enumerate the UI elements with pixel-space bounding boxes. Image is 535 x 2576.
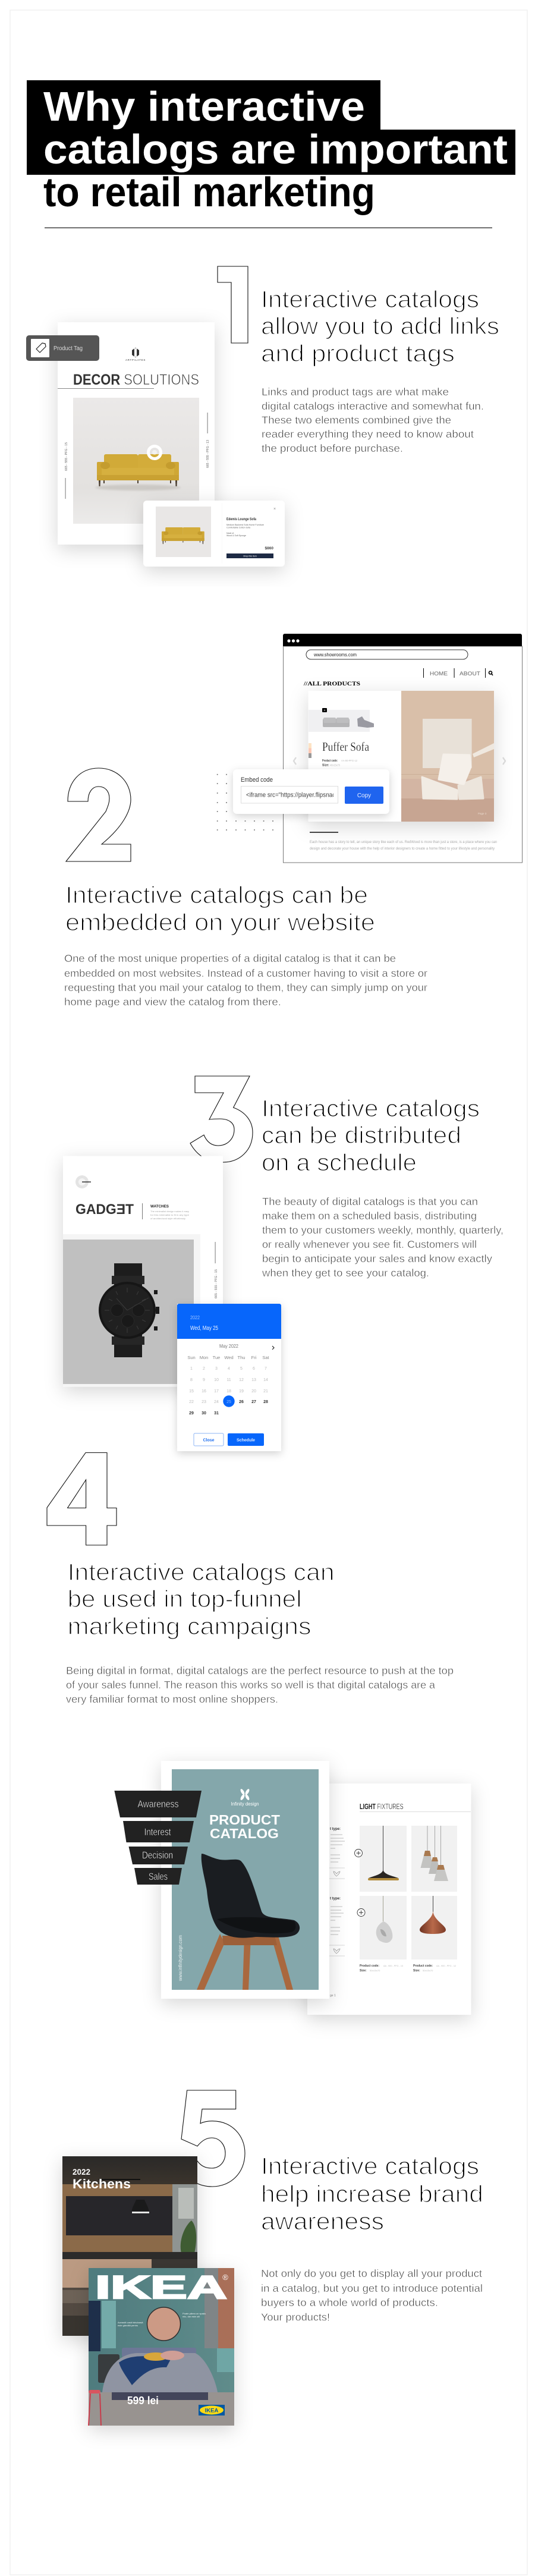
- heading 1: and product tags: [261, 341, 455, 367]
- date grid: 16: [202, 1389, 206, 1394]
- ikea wordmark: IKEA: [95, 2269, 227, 2305]
- heading 3: can be distributed: [262, 1122, 461, 1149]
- heading 5: help increase brand: [261, 2181, 483, 2207]
- embed code card: Copy: [357, 792, 371, 799]
- heading 2: Interactive catalogs can be: [65, 882, 368, 908]
- date grid: 25: [226, 1400, 231, 1404]
- heading 4: be used in top-funnel: [68, 1586, 302, 1612]
- infinity design logo: [231, 1788, 259, 1807]
- title: catalogs are important: [43, 126, 508, 172]
- title: [27, 80, 515, 215]
- site nav: HOME: [430, 671, 448, 677]
- product panel: AA-90-PFG-12: [341, 759, 357, 762]
- product popup: Wood & Soft Sponge: [226, 534, 246, 537]
- body text 3: or really whenever you see fit. Customers will: [262, 1238, 477, 1250]
- product popup: Made of:: [226, 532, 234, 534]
- catalog cover: ikea: ®: [222, 2273, 228, 2282]
- body text 4: Being digital in format, digital catalogs are the perfect resource to push at the top: [66, 1665, 454, 1677]
- body text 2: requesting that you mail your catalog to them, they can simply jump on your: [64, 982, 427, 993]
- heading 1: allow you to add links: [261, 313, 499, 339]
- catalog page: gadget: The minimalist design makes it easy: [150, 1210, 189, 1213]
- embed code card: [233, 769, 389, 814]
- body text 5: buyers to a whole world of products.: [261, 2297, 438, 2308]
- catalog page: gadget: for this minimalist to fit in any type: [150, 1213, 190, 1216]
- heading 4: marketing campaigns: [68, 1613, 311, 1640]
- product codes: 50x15x70: [423, 1969, 433, 1972]
- catalog page: light fixtures: [307, 1784, 471, 2015]
- product name: Puffer Sofa: [322, 740, 370, 754]
- body text 1: digital catalogs interactive and somewhat fun.: [262, 400, 484, 412]
- pendant lamp tile 3: [360, 1896, 407, 1959]
- catalog cover: product catalog: [161, 1761, 329, 1999]
- body text 5: Your products!: [261, 2311, 330, 2323]
- icon: search: [489, 671, 493, 675]
- site nav: [423, 668, 493, 678]
- clipped product column: t type:: [330, 1897, 341, 1901]
- body text 2: embedded on most websites. Instead of a customer having to visit a store or: [64, 967, 427, 979]
- funnel: sales: Sales: [149, 1871, 168, 1882]
- product codes: Size:: [360, 1969, 367, 1973]
- clipped product column: [329, 1828, 345, 1998]
- calendar header: [177, 1304, 281, 1339]
- body text 2: One of the most unique properties of a digital catalog is that it can be: [64, 952, 396, 964]
- catalog title: DECOR SOLUTIONS: [73, 372, 199, 388]
- colour swatches: [309, 743, 311, 758]
- heading 1: Interactive catalogs: [261, 287, 479, 313]
- browser mockup: design and decorate your house with the help of interior designers to create a home fitted to your lifestyle and personality: [310, 847, 495, 851]
- catalog cover: kitchens: 2022: [73, 2168, 90, 2176]
- heading 5: [261, 2153, 483, 2235]
- section 3: [63, 1076, 503, 1451]
- date grid: 1: [190, 1367, 193, 1371]
- tiny captions: [118, 2312, 206, 2327]
- browser mockup: Each house has a story to tell, an unique story like each of us. RedWood is more than just a store, is a place where you can: [310, 840, 497, 844]
- weekdays: Fri: [251, 1355, 257, 1360]
- catalog cover: kitchens: Kitchens: [73, 2176, 131, 2191]
- pendant lamp tile 1: [360, 1826, 407, 1892]
- body text 5: Not only do you get to display all your product: [261, 2267, 482, 2279]
- date grid: 21: [263, 1389, 268, 1394]
- product popup: Edemis Lounge Sofa: [226, 518, 257, 521]
- infinity design logo: Infinity design: [231, 1801, 259, 1807]
- body text 3: them to your customers weekly, monthly, quarterly,: [262, 1224, 503, 1236]
- date grid: 5: [240, 1367, 243, 1371]
- date grid: 22: [189, 1400, 194, 1404]
- product codes: Product code:: [413, 1964, 433, 1968]
- date grid: 14: [263, 1378, 268, 1382]
- url vertical: www.infinitydesign.com: [178, 1935, 183, 1981]
- product panel: Product code:: [322, 759, 338, 763]
- ikea badge: IKEA: [205, 2408, 218, 2414]
- carousel arrows: [294, 757, 296, 765]
- side text: 665 - 555 - PFG - 13: [206, 440, 210, 468]
- date grid: 12: [239, 1378, 244, 1382]
- weekdays: [187, 1355, 270, 1360]
- number 2: [66, 768, 131, 861]
- date grid: 6: [253, 1367, 255, 1371]
- close button: Close: [203, 1439, 215, 1442]
- date grid: 19: [239, 1389, 244, 1394]
- product tag badge: [26, 335, 99, 361]
- footer rule and text: [310, 832, 338, 833]
- calendar header: Wed, May 25: [190, 1325, 218, 1332]
- weekdays: Wed: [224, 1355, 234, 1360]
- body text 1: the product before purchase.: [262, 442, 403, 454]
- schedule button: Schedule: [237, 1439, 255, 1442]
- tiny captions: este gândită pentru: [118, 2324, 138, 2327]
- weekdays: Tue: [213, 1355, 220, 1360]
- catalog cover: kitchens: [62, 2156, 197, 2336]
- catalog page: gadget: [63, 1156, 223, 1386]
- funnel: awareness: Awareness: [138, 1798, 178, 1810]
- dot grid: [217, 774, 273, 831]
- catalog page: decor solutions: [58, 322, 215, 545]
- funnel: awareness: [114, 1791, 202, 1817]
- cover title: PRODUCT: [209, 1812, 280, 1828]
- product codes: [360, 1964, 457, 1973]
- calendar widget: [177, 1304, 281, 1451]
- date grid: 7: [265, 1367, 267, 1371]
- weekdays: Thu: [238, 1355, 245, 1360]
- body text 2: [64, 952, 427, 1008]
- body text 1: Links and product tags are what make: [262, 386, 449, 398]
- heading 3: [262, 1096, 480, 1176]
- brand logo: [125, 348, 146, 361]
- brand mark: [75, 1175, 91, 1188]
- date grid: 15: [189, 1389, 194, 1394]
- number 1: [218, 266, 248, 343]
- body text 1: reader everything they need to know about: [262, 428, 474, 440]
- date grid: 4: [228, 1367, 230, 1371]
- date grid: 3: [215, 1367, 218, 1371]
- product popup: Comfortable Cotton Sofa: [226, 527, 250, 529]
- section 5: [62, 2090, 483, 2426]
- pendant lamp tile 4: [411, 1896, 457, 1959]
- date grid: 11: [226, 1378, 231, 1382]
- page heading: LIGHT FIXTURES: [360, 1802, 404, 1811]
- product panel: +: [323, 709, 326, 713]
- tiny captions: Această casă fabuloasă: [118, 2321, 143, 2324]
- clipped product column: t type:: [330, 1828, 341, 1831]
- funnel: interest: [123, 1821, 194, 1842]
- date grid: 20: [251, 1389, 256, 1394]
- sales funnel: [114, 1791, 202, 1885]
- tiny captions: mic, dar este util: [182, 2315, 200, 2318]
- chair thumbnail: [357, 716, 374, 728]
- icon: next month: [272, 1346, 274, 1350]
- schedule button: [228, 1433, 264, 1446]
- product panel: [309, 691, 494, 822]
- body text 4: of your sales funnel. The reason this works so well is that digital catalogs are a: [66, 1679, 435, 1691]
- date grid: 31: [214, 1411, 219, 1416]
- weekdays: Sat: [262, 1355, 270, 1360]
- date grid: 28: [263, 1400, 268, 1404]
- funnel: interest: Interest: [144, 1826, 171, 1838]
- tiny captions: Poate părea un spațiu: [182, 2312, 206, 2315]
- catalog page: gadget: of architectural style effortlessly: [150, 1217, 185, 1220]
- heading 4: [68, 1559, 335, 1640]
- browser mockup: [283, 634, 524, 863]
- section 2: [64, 634, 524, 1008]
- price: 599 lei: [127, 2395, 159, 2407]
- product codes: 50x15x70: [370, 1969, 380, 1972]
- heading 5: Interactive catalogs: [261, 2153, 479, 2179]
- browser bar: [283, 634, 522, 646]
- catalog page: gadget: 665 - 555 - PFG - 15: [215, 1269, 218, 1298]
- date grid: 23: [202, 1400, 206, 1404]
- body text 1: [262, 386, 484, 454]
- sofa thumbnail: [323, 718, 350, 727]
- weekdays: Sun: [187, 1355, 196, 1360]
- funnel: sales: [134, 1868, 182, 1885]
- address bar: www.showrooms.com: [313, 652, 357, 658]
- chair: [197, 1854, 300, 1990]
- product popup: ×: [273, 507, 276, 511]
- product codes: AA - 900 - PFG - 13: [383, 1964, 404, 1967]
- product popup: $860: [265, 546, 273, 551]
- date grid: 26: [239, 1400, 244, 1404]
- cover title: CATALOG: [210, 1826, 279, 1841]
- bed: [122, 2348, 196, 2357]
- date grid: 17: [214, 1389, 219, 1394]
- heading 4: Interactive catalogs can: [68, 1559, 335, 1586]
- room photo: [401, 691, 494, 822]
- date grid: 10: [214, 1378, 219, 1382]
- calendar widget: May 2022: [219, 1343, 238, 1349]
- body text 3: The beauty of digital catalogs is that you can: [262, 1196, 478, 1207]
- body text 4: [66, 1665, 454, 1705]
- body text 3: begin to anticipate your sales and know exactly: [262, 1253, 492, 1265]
- room photo: Page 3: [478, 812, 487, 815]
- body text 3: make them on a scheduled basis, distributing: [262, 1210, 477, 1222]
- pendant lamp tile 2: [411, 1826, 457, 1892]
- product panel: 40x15x70: [330, 763, 340, 767]
- section 1: [26, 266, 499, 567]
- date grid: 27: [251, 1400, 256, 1404]
- cover title: [209, 1812, 280, 1841]
- funnel: decision: Decision: [142, 1850, 173, 1861]
- clipped product column: ge 1: [330, 1994, 336, 1998]
- catalog title: GADGƎT: [75, 1201, 134, 1218]
- heading 5: awareness: [261, 2209, 384, 2235]
- number 3: [190, 1076, 253, 1162]
- side text: [65, 413, 210, 499]
- product codes: Size:: [413, 1969, 420, 1973]
- heading 2: embedded on your website: [65, 910, 375, 936]
- sofa photo: [73, 398, 199, 524]
- heading 2: [65, 882, 375, 936]
- heading 3: on a schedule: [262, 1150, 417, 1176]
- body text 2: home page and view the catalog from there.: [64, 996, 281, 1008]
- product codes: Product code:: [360, 1964, 379, 1968]
- nightstand: [98, 2354, 119, 2383]
- heading 1: [261, 287, 499, 367]
- body text 5: [261, 2267, 483, 2323]
- date grid: 2: [203, 1367, 205, 1371]
- address bar: [306, 650, 468, 659]
- product codes: AA - 900 - PFG - 12: [436, 1964, 457, 1967]
- product tag badge: Product Tag: [54, 345, 83, 352]
- date grid: 29: [189, 1411, 194, 1416]
- funnel: decision: [128, 1847, 188, 1864]
- section 4: [47, 1453, 471, 2015]
- date grid: 8: [190, 1378, 193, 1382]
- date grid: 30: [202, 1411, 206, 1416]
- number 5: [181, 2090, 245, 2187]
- number 4: [47, 1453, 117, 1545]
- product panel: Size:: [322, 763, 329, 767]
- product popup: [143, 501, 285, 567]
- weekdays: Mon: [200, 1355, 208, 1360]
- add icons: [354, 1849, 365, 1917]
- ikea badge: [199, 2405, 225, 2415]
- embed code card: Embed code: [241, 776, 273, 784]
- product popup: Shop this item: [243, 555, 257, 558]
- heading 3: Interactive catalogs: [262, 1096, 480, 1122]
- date grid: 13: [251, 1378, 256, 1382]
- product popup: Medium Backrest Sofa Home Furniture: [226, 524, 264, 526]
- title: to retail marketing: [43, 169, 375, 215]
- site nav: ABOUT: [460, 671, 481, 677]
- close button: [194, 1433, 224, 1446]
- section label: //ALL PRODUCTS: [303, 681, 360, 687]
- body text 1: These two elements combined give the: [262, 414, 451, 426]
- body text 3: [262, 1196, 503, 1279]
- date grid: 18: [226, 1389, 231, 1394]
- date grid: 24: [214, 1400, 219, 1404]
- catalog page: gadget: WATCHES: [150, 1204, 169, 1209]
- date grid: [189, 1367, 268, 1416]
- date grid: 9: [203, 1378, 205, 1382]
- catalog cover: ikea: [89, 2268, 234, 2426]
- mirror: [147, 2307, 181, 2341]
- icon: tag: [36, 343, 46, 353]
- brand logo: ARTPILATES: [125, 358, 146, 361]
- watch photo: [63, 1234, 200, 1386]
- calendar header: 2022: [190, 1314, 200, 1320]
- side text: 665 - 555 - PFG - 15: [65, 442, 68, 471]
- body text 5: in a catalog, but you get to introduce potential: [261, 2282, 483, 2294]
- title: Why interactive: [43, 83, 365, 130]
- body text 3: when they get to see your catalog.: [262, 1267, 429, 1279]
- body text 4: very familiar format to most online shoppers.: [66, 1693, 278, 1705]
